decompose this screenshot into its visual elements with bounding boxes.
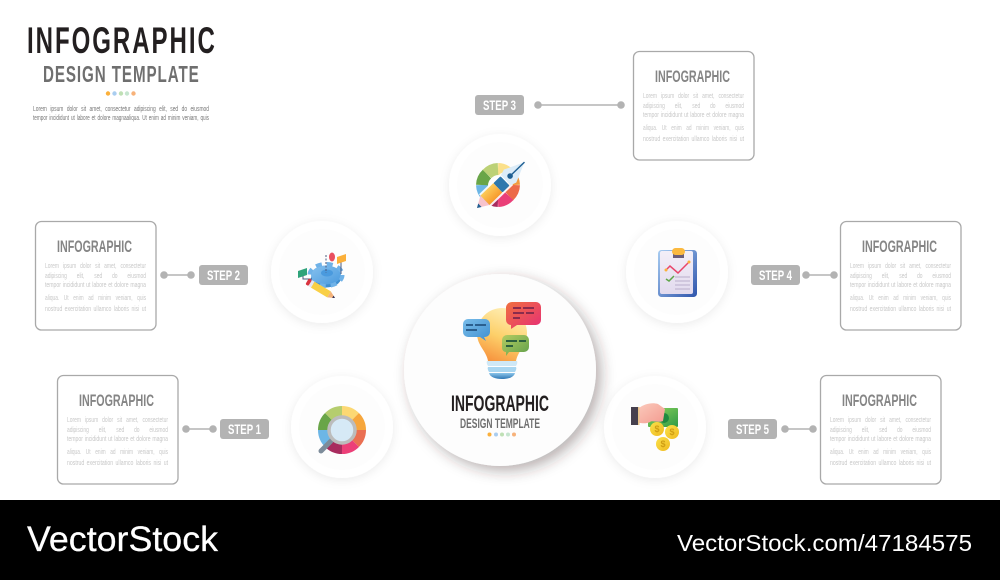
icon: isometric gear bbox=[298, 252, 346, 301]
icon: hand with bill and coins bbox=[631, 403, 679, 451]
icon: hand with bill and coins: $ bbox=[654, 424, 660, 434]
panel: step 4 text card: INFOGRAPHIC bbox=[862, 238, 937, 256]
hub colour dots bbox=[488, 432, 516, 436]
panel: step 2 text card bbox=[36, 222, 156, 330]
panel: step 2 text card: tempor incididunt ut labore et dolore magna bbox=[45, 280, 147, 289]
icon: colour wheel with magnifier bbox=[325, 413, 359, 447]
intro text: Lorem ipsum dolor sit amet, consectetur adipiscing elit, sed do eiusmod bbox=[33, 106, 209, 113]
connector and label: step 3 bbox=[475, 95, 625, 115]
panel: step 5 text card: adipiscing elit, sed do eiusmod bbox=[830, 425, 931, 434]
footer url: VectorStock.com/47184575 bbox=[677, 530, 972, 556]
icon: blue speech bubble bbox=[463, 319, 490, 341]
hub subtitle: DESIGN TEMPLATE bbox=[460, 415, 540, 431]
connector and label: step 2 bbox=[160, 265, 248, 285]
step 1 circle with magnifier icon bbox=[291, 376, 393, 478]
icon: red speech bubble bbox=[506, 302, 541, 329]
panel: step 5 text card: tempor incididunt ut labore et dolore magna bbox=[830, 434, 932, 443]
panel: step 1 text card: adipiscing elit, sed do eiusmod bbox=[67, 425, 168, 434]
panel: step 2 text card: INFOGRAPHIC bbox=[57, 238, 132, 256]
panel: step 3 text card: aliqua. Ut enim ad minim veniam, quis bbox=[643, 123, 744, 132]
intro text bbox=[33, 106, 209, 122]
panel: step 5 text card: nostrud exercitation ullamco laboris nisi ut bbox=[830, 458, 932, 467]
panel: step 2 text card: aliqua. Ut enim ad minim veniam, quis bbox=[45, 293, 146, 302]
panel: step 5 text card: aliqua. Ut enim ad minim veniam, quis bbox=[830, 447, 931, 456]
panel: step 3 text card: INFOGRAPHIC bbox=[655, 68, 730, 86]
panel: step 3 text card: adipiscing elit, sed do eiusmod bbox=[643, 101, 744, 110]
panel: step 4 text card: adipiscing elit, sed do eiusmod bbox=[850, 271, 951, 280]
panel: step 2 text card: nostrud exercitation ullamco laboris nisi ut bbox=[45, 304, 147, 313]
title block bbox=[27, 20, 215, 122]
connector and label: step 5: STEP 5 bbox=[736, 421, 769, 437]
title colour dots bbox=[106, 91, 136, 96]
panel: step 3 text card bbox=[634, 52, 754, 160]
connector and label: step 5 bbox=[728, 419, 817, 439]
icon: colour wheel bbox=[482, 169, 514, 201]
panel: step 4 text card bbox=[840, 222, 961, 330]
panel: step 1 text card bbox=[58, 376, 178, 484]
panel: step 4 text card: nostrud exercitation ullamco laboris nisi ut bbox=[850, 304, 952, 313]
icon: green speech bubble bbox=[502, 335, 529, 356]
panel: step 3 text card: tempor incididunt ut labore et dolore magna bbox=[643, 110, 745, 119]
panel: step 1 text card: nostrud exercitation ullamco laboris nisi ut bbox=[67, 458, 169, 467]
intro text: tempor incididunt ut labore et dolore magnaaliqua. Ut enim ad minim veniam, quis bbox=[33, 115, 209, 122]
step 5 circle with money icon bbox=[604, 376, 706, 478]
icon: clipboard bbox=[658, 248, 697, 297]
panel: step 4 text card: Lorem ipsum dolor sit amet, consectetur bbox=[850, 261, 951, 270]
step 4 circle with clipboard icon bbox=[626, 221, 728, 323]
panel: step 4 text card: tempor incididunt ut labore et dolore magna bbox=[850, 280, 952, 289]
panel: step 3 text card: nostrud exercitation ullamco laboris nisi ut bbox=[643, 134, 745, 143]
panel: step 3 text card: Lorem ipsum dolor sit amet, consectetur bbox=[643, 91, 744, 100]
panel: step 2 text card: adipiscing elit, sed do eiusmod bbox=[45, 271, 146, 280]
panel: step 1 text card: INFOGRAPHIC bbox=[79, 392, 154, 410]
connector and label: step 3: STEP 3 bbox=[483, 97, 516, 113]
panel: step 5 text card bbox=[820, 376, 941, 484]
connector and label: step 1: STEP 1 bbox=[228, 421, 261, 437]
footer logo: VectorStock bbox=[27, 520, 219, 559]
panel: step 1 text card: Lorem ipsum dolor sit amet, consectetur bbox=[67, 415, 168, 424]
step 3 circle with pen and colour wheel icon bbox=[449, 134, 551, 236]
panel: step 1 text card: aliqua. Ut enim ad minim veniam, quis bbox=[67, 447, 168, 456]
subtitle: DESIGN TEMPLATE bbox=[43, 62, 199, 88]
icon: hand with bill and coins: $ bbox=[669, 427, 675, 437]
main title: INFOGRAPHIC bbox=[27, 20, 215, 61]
panel: step 2 text card: Lorem ipsum dolor sit amet, consectetur bbox=[45, 261, 146, 270]
connector and label: step 1 bbox=[182, 419, 269, 439]
icon: pencil and nib bbox=[471, 156, 531, 214]
icon: magnifier bbox=[321, 417, 355, 451]
footer bar bbox=[0, 500, 1000, 580]
icon: light bulb bbox=[477, 308, 527, 379]
panel: step 1 text card: tempor incididunt ut labore et dolore magna bbox=[67, 434, 169, 443]
connector and label: step 4 bbox=[751, 265, 838, 285]
step 2 circle with gear icon bbox=[271, 221, 373, 323]
icon: hand with bill and coins: $ bbox=[660, 439, 666, 449]
panel: step 5 text card: INFOGRAPHIC bbox=[842, 392, 917, 410]
connector and label: step 4: STEP 4 bbox=[759, 267, 792, 283]
central hub circle bbox=[404, 274, 596, 466]
connector and label: step 2: STEP 2 bbox=[207, 267, 240, 283]
panel: step 5 text card: Lorem ipsum dolor sit amet, consectetur bbox=[830, 415, 931, 424]
hub title: INFOGRAPHIC bbox=[451, 391, 549, 416]
